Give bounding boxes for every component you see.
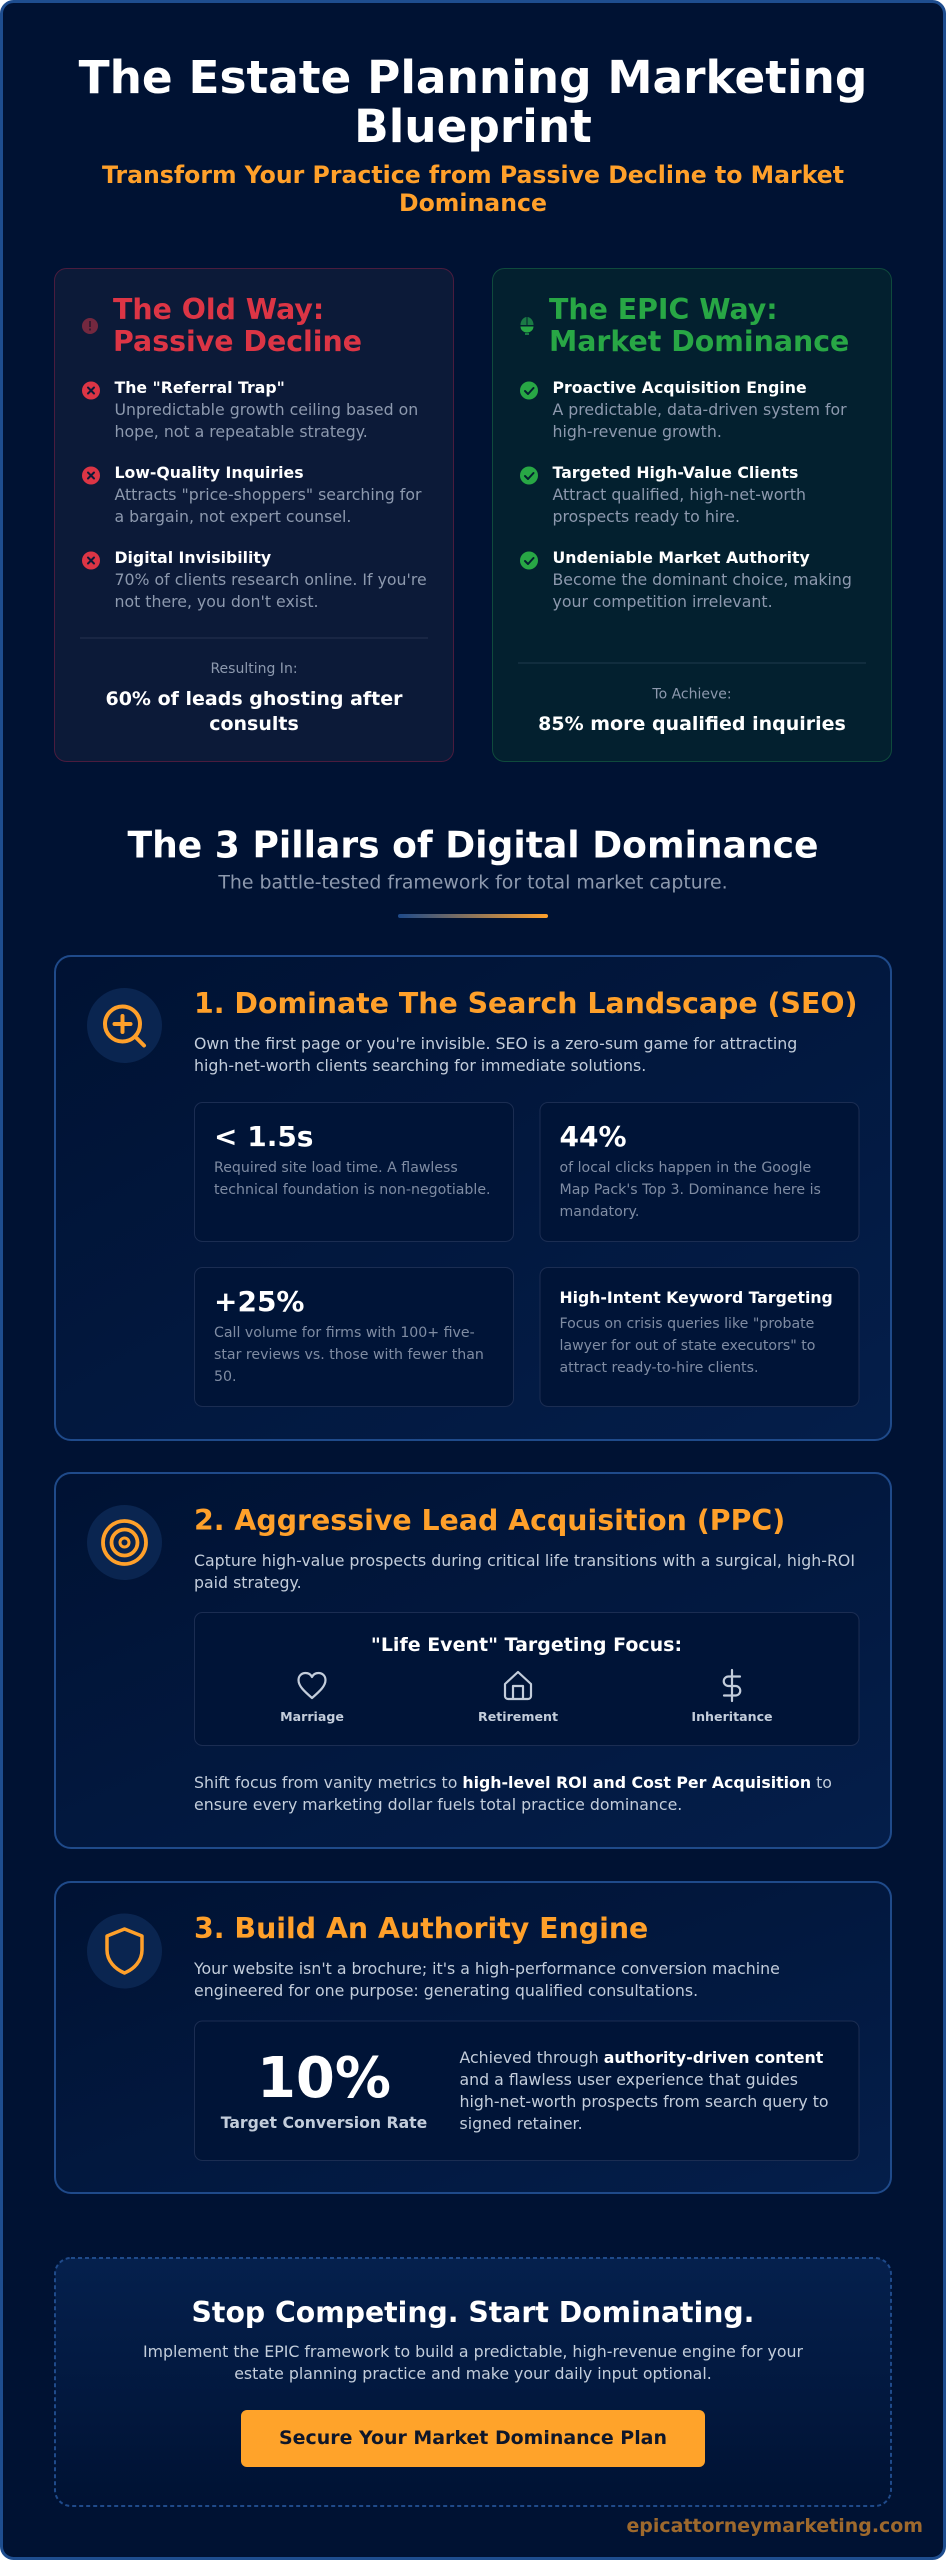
stat: call volume: 50. bbox=[214, 1369, 236, 1385]
stat: keyword targeting: attract ready-to-hire clients. bbox=[560, 1360, 758, 1376]
heading: authority: 3. Build An Authority Engine bbox=[194, 1912, 648, 1945]
item: digital invisibility: not there, you don't exist. bbox=[114, 592, 319, 611]
item: undeniable market authority: Undeniable Market Authority bbox=[552, 548, 810, 567]
item: proactive acquisition engine: high-revenue growth. bbox=[552, 422, 722, 441]
heading: old way: The Old Way: bbox=[113, 293, 324, 326]
title: Blueprint bbox=[354, 100, 592, 153]
panel: pillar 3 authority bbox=[55, 1882, 891, 2193]
item: undeniable market authority: Become the dominant choice, making bbox=[552, 570, 852, 589]
icon: inheritance bbox=[691, 1670, 773, 1724]
stat: local clicks: 44% bbox=[560, 1120, 627, 1153]
item: targeted high-value clients bbox=[520, 463, 806, 526]
text: roi note: Shift focus from vanity metrics to high-level ROI and Cost Per Acquisition to bbox=[194, 1773, 832, 1792]
item: undeniable market authority: your competition irrelevant. bbox=[552, 592, 773, 611]
heading: 3 pillars: The battle-tested framework for total market capture. bbox=[217, 872, 728, 894]
panel: call to action bbox=[55, 2258, 891, 2506]
stat: keyword targeting: Focus on crisis queries like "probate bbox=[560, 1316, 814, 1332]
icon: marriage bbox=[280, 1673, 344, 1724]
item: targeted high-value clients: Attract qualified, high-net-worth bbox=[552, 485, 806, 504]
heading: 3 pillars bbox=[127, 824, 819, 918]
text: authority intro: engineered for one purpose: generating qualified consultations. bbox=[194, 1981, 698, 2000]
stat: keyword targeting: lawyer for out of state executors" to bbox=[560, 1338, 815, 1354]
heading: 3 pillars: The 3 Pillars of Digital Dominance bbox=[127, 824, 819, 866]
panel: life event targeting: "Life Event" Targeting Focus: bbox=[371, 1634, 682, 1656]
stat: keyword targeting bbox=[540, 1268, 859, 1406]
item: targeted high-value clients: Targeted High-Value Clients bbox=[552, 463, 798, 482]
item: targeted high-value clients: prospects ready to hire. bbox=[552, 507, 740, 526]
result: epic way: To Achieve: bbox=[651, 686, 732, 702]
text: cta body: estate planning practice and make your daily input optional. bbox=[234, 2364, 712, 2383]
text: seo intro bbox=[194, 1034, 797, 1075]
text: cta body bbox=[143, 2342, 803, 2383]
result: old way: 60% of leads ghosting after bbox=[105, 688, 403, 710]
footer url: epicattorneymarketing.com bbox=[626, 2515, 923, 2537]
text: conversion detail: Achieved through authority-driven content bbox=[460, 2048, 824, 2067]
result: old way: Resulting In: bbox=[210, 661, 298, 677]
result: epic way: 85% more qualified inquiries bbox=[538, 713, 846, 735]
item: low-quality inquiries bbox=[82, 463, 422, 526]
text: ppc intro: Capture high-value prospects during critical life transitions with a surgical, high-ROI bbox=[194, 1551, 855, 1570]
heading: old way bbox=[113, 293, 362, 358]
stat: 10 percent: Target Conversion Rate bbox=[221, 2113, 427, 2132]
panel: conversion rate bbox=[194, 2021, 859, 2160]
stat: local clicks: of local clicks happen in the Google bbox=[560, 1160, 811, 1176]
icon: inheritance: Inheritance bbox=[691, 1709, 773, 1724]
subtitle: Transform Your Practice from Passive Decline to Market bbox=[102, 161, 844, 189]
item: low-quality inquiries: a bargain, not expert counsel. bbox=[114, 507, 351, 526]
stat: load time bbox=[194, 1102, 514, 1242]
icon: marriage: Marriage bbox=[280, 1709, 344, 1724]
item: digital invisibility: 70% of clients research online. If you're bbox=[114, 570, 427, 589]
heading: cta: Stop Competing. Start Dominating. bbox=[192, 2296, 754, 2329]
item: digital invisibility: Digital Invisibility bbox=[114, 548, 271, 567]
item: referral trap: The "Referral Trap" bbox=[114, 378, 285, 397]
item: proactive acquisition engine bbox=[520, 378, 847, 441]
stat: load time: < 1.5s bbox=[214, 1120, 313, 1153]
panel: the epic way bbox=[492, 268, 892, 762]
stat: keyword targeting: High-Intent Keyword Targeting bbox=[560, 1288, 833, 1307]
subtitle bbox=[102, 161, 844, 217]
title bbox=[79, 51, 867, 153]
heading: ppc: 2. Aggressive Lead Acquisition (PPC) bbox=[194, 1504, 785, 1537]
stat: local clicks bbox=[540, 1102, 859, 1242]
stat: call volume: Call volume for firms with 100+ five- bbox=[214, 1325, 475, 1341]
button bbox=[241, 2410, 705, 2467]
item: referral trap: Unpredictable growth ceiling based on bbox=[114, 400, 418, 419]
text: roi note bbox=[194, 1773, 832, 1814]
icon: magnifier bbox=[87, 988, 162, 1063]
stat: 10 percent: 10% bbox=[257, 2046, 391, 2111]
text: ppc intro: paid strategy. bbox=[194, 1573, 302, 1592]
heading: epic way bbox=[549, 293, 849, 358]
stat: call volume: star reviews vs. those with fewer than bbox=[214, 1347, 484, 1363]
stat: load time: technical foundation is non-negotiable. bbox=[214, 1182, 491, 1198]
stat: local clicks: mandatory. bbox=[560, 1204, 639, 1220]
text: conversion detail: and a flawless user experience that guides bbox=[460, 2070, 798, 2089]
icon: retirement bbox=[478, 1672, 558, 1724]
heading: epic way: The EPIC Way: bbox=[549, 293, 778, 326]
stat: call volume: +25% bbox=[214, 1285, 304, 1318]
text: conversion detail: high-net-worth prospects from search query to bbox=[460, 2092, 829, 2111]
icon: shield bbox=[87, 1914, 162, 1988]
panel: pillar 2 ppc bbox=[55, 1473, 891, 1848]
stat: call volume bbox=[194, 1268, 514, 1406]
icon: warning bbox=[82, 318, 98, 334]
item: digital invisibility bbox=[82, 548, 427, 611]
icon: retirement: Retirement bbox=[478, 1709, 558, 1724]
stat: local clicks: Map Pack's Top 3. Dominance here is bbox=[560, 1182, 821, 1198]
text: roi note: ensure every marketing dollar fuels total practice dominance. bbox=[194, 1795, 682, 1814]
heading: epic way: Market Dominance bbox=[549, 325, 849, 358]
text: conversion detail bbox=[460, 2048, 829, 2133]
item: low-quality inquiries: Low-Quality Inquiries bbox=[114, 463, 304, 482]
panel: life event targeting bbox=[194, 1612, 859, 1746]
text: authority intro: Your website isn't a brochure; it's a high-performance conversion machine bbox=[193, 1959, 780, 1978]
heading: seo: 1. Dominate The Search Landscape (SEO) bbox=[194, 987, 857, 1020]
item: low-quality inquiries: Attracts "price-shoppers" searching for bbox=[114, 485, 422, 504]
panel: the old way bbox=[54, 268, 454, 762]
text: cta body: Implement the EPIC framework to build a predictable, high-revenue engine for your bbox=[143, 2342, 803, 2361]
result: old way: consults bbox=[209, 713, 299, 735]
icon: target bbox=[87, 1505, 162, 1580]
text: conversion detail: signed retainer. bbox=[460, 2114, 583, 2133]
stat: 10 percent bbox=[221, 2046, 427, 2132]
title: The Estate Planning Marketing bbox=[79, 51, 867, 104]
text: seo intro: Own the first page or you're invisible. SEO is a zero-sum game for attracting bbox=[194, 1034, 797, 1053]
result: epic way bbox=[538, 686, 846, 735]
item: referral trap: hope, not a repeatable strategy. bbox=[114, 422, 368, 441]
item: undeniable market authority bbox=[520, 548, 852, 611]
item: proactive acquisition engine: A predictable, data-driven system for bbox=[552, 400, 847, 419]
panel: pillar 1 seo bbox=[55, 956, 891, 1440]
subtitle: Dominance bbox=[399, 189, 547, 217]
text: authority intro bbox=[193, 1959, 780, 2000]
stat: load time: Required site load time. A flawless bbox=[214, 1160, 458, 1176]
result: old way bbox=[105, 661, 403, 735]
item: proactive acquisition engine: Proactive Acquisition Engine bbox=[552, 378, 807, 397]
button: Secure Your Market Dominance Plan bbox=[279, 2427, 667, 2449]
text: ppc intro bbox=[194, 1551, 855, 1592]
text: seo intro: high-net-worth clients searching for immediate solutions. bbox=[194, 1056, 646, 1075]
item: referral trap bbox=[82, 378, 418, 441]
icon: epic way bbox=[520, 317, 534, 335]
heading: old way: Passive Decline bbox=[113, 325, 362, 358]
